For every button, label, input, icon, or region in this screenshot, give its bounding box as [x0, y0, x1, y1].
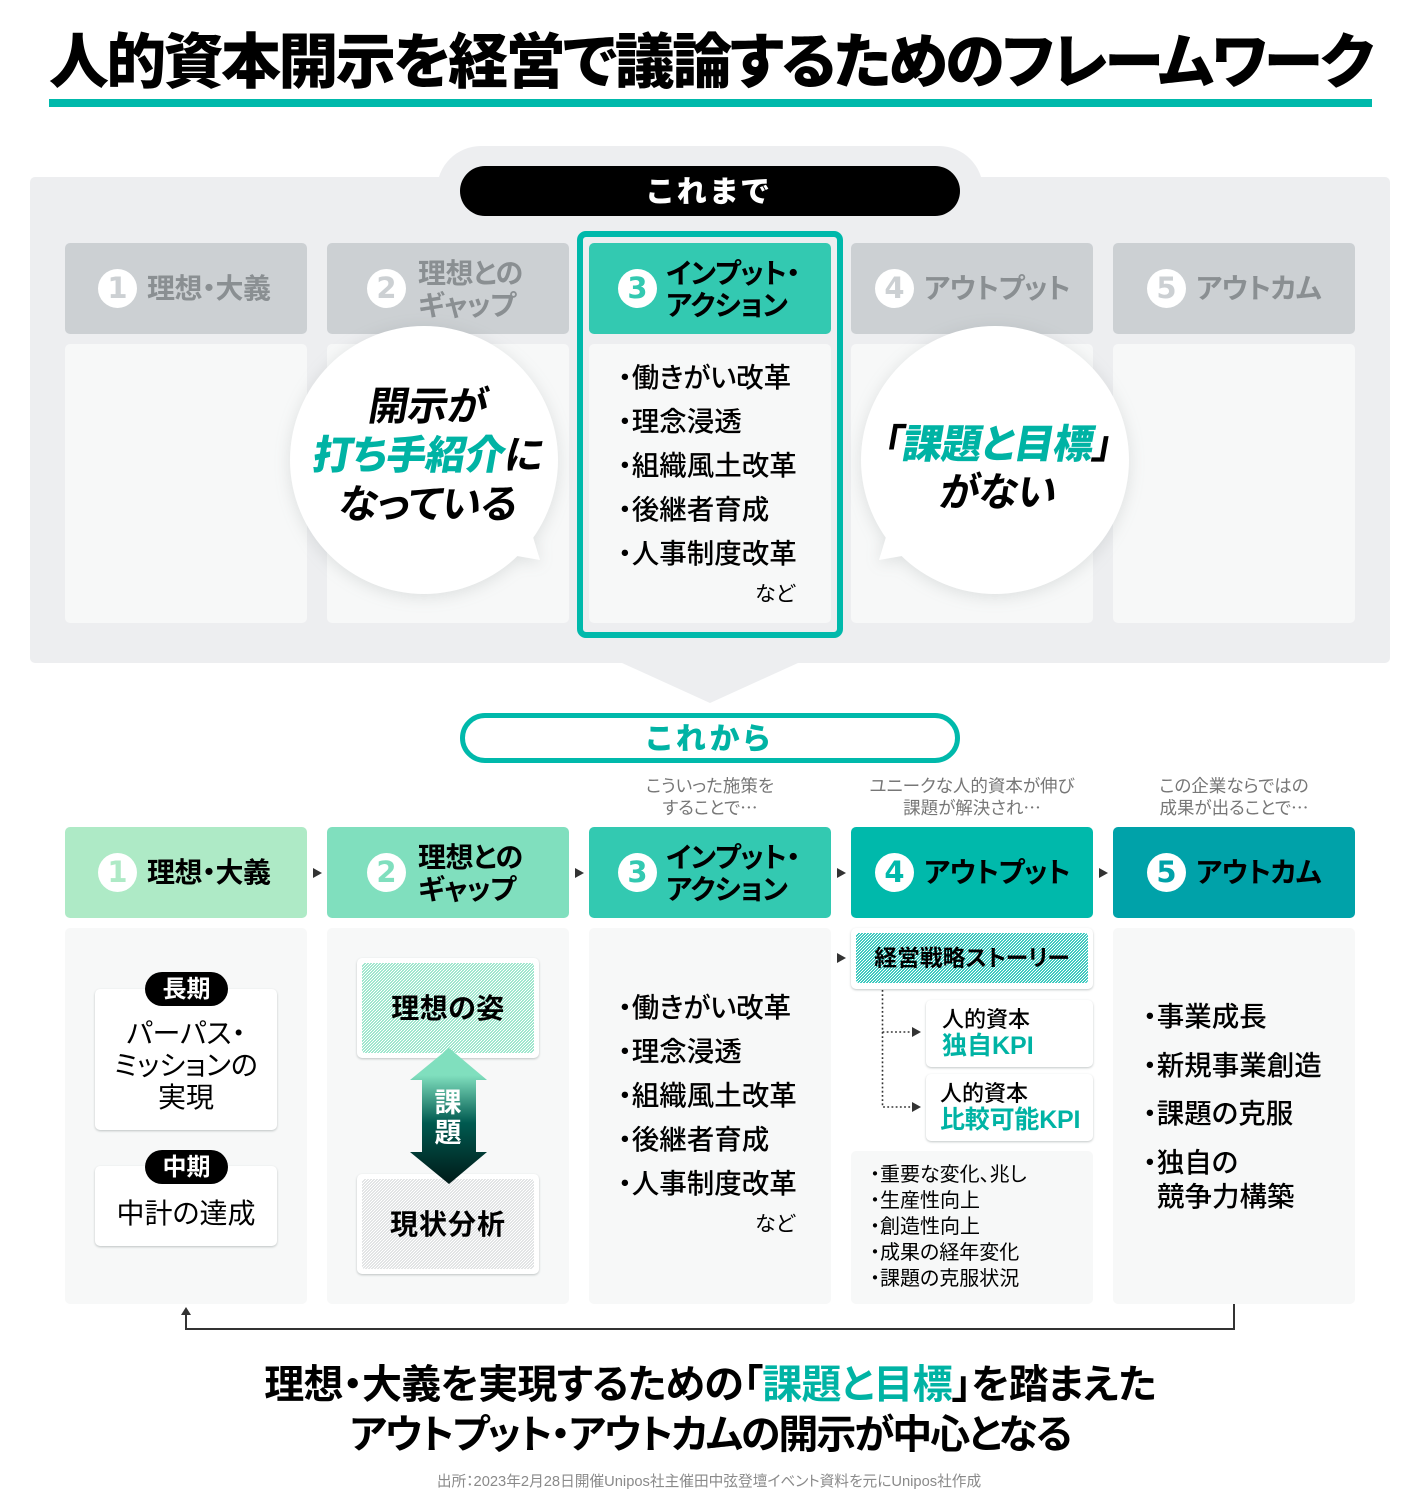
- arrow 1 to 2: [313, 868, 322, 878]
- list of actions: ・理念浸透: [618, 1036, 742, 1067]
- card text: 人的資本: [940, 1081, 1028, 1106]
- caption column 4: ユニークな人的資本が伸び: [870, 776, 1074, 796]
- column 4 header: アウトプット: [924, 273, 1070, 304]
- panel background: [30, 177, 1390, 663]
- hatched text block: 理想の姿: [391, 993, 505, 1024]
- body column 2: [327, 928, 569, 1304]
- caption column 5: [1159, 776, 1309, 820]
- badge: 長期: 長期: [162, 976, 210, 1003]
- column 1 body: [65, 344, 307, 623]
- column 5 header: [1113, 243, 1355, 334]
- conclusion text: [264, 1363, 1156, 1457]
- column 3 header: [589, 243, 831, 334]
- list of outcomes: ・事業成長: [1143, 1001, 1267, 1032]
- speech bubble left: [286, 326, 562, 601]
- bubble text: 開示が: [365, 385, 491, 429]
- bubble shape: [286, 326, 562, 601]
- column 5 body: [1113, 344, 1355, 623]
- column 2 header: [327, 243, 569, 334]
- list of actions: ・後継者育成: [618, 1124, 769, 1155]
- badge: 中期: 中期: [162, 1154, 210, 1181]
- bubble text: 打ち手紹介に: [309, 434, 547, 478]
- arrow to 経営戦略ストーリー: [837, 953, 846, 963]
- header 1: 理想・大義: 1: [107, 855, 128, 889]
- header 3: インプット・アクション: 3: [627, 855, 648, 889]
- arrow 4 to 5: [1099, 868, 1108, 878]
- title underline: [49, 99, 1372, 107]
- list of actions: [618, 992, 797, 1199]
- header 2: 理想とのギャップ: ギャップ: [418, 874, 516, 905]
- column 3 body list: ・働きがい改革: [618, 362, 791, 393]
- double arrow 課題: [410, 1048, 487, 1184]
- column 3 body list: ・人事制度改革: [618, 538, 797, 569]
- card: 理想の姿: [357, 958, 539, 1058]
- list text: ・成果の経年変化: [870, 1242, 1019, 1264]
- arrow 3 to 4: [837, 868, 846, 878]
- header 2: 理想とのギャップ: 理想との: [418, 842, 523, 873]
- title: 人的資本開示を経営で議論するためのフレームワーク: [49, 29, 1371, 96]
- list text: ・創造性向上: [870, 1216, 980, 1238]
- label 課題: 課: [434, 1088, 462, 1118]
- column 2 body: [327, 344, 569, 623]
- card: 中計の達成: [95, 1166, 277, 1246]
- column 1 header: 1: [107, 271, 128, 305]
- card text: 比較可能KPI: [940, 1106, 1080, 1134]
- column 1 header: [65, 243, 307, 334]
- column 4 header: 4: [884, 271, 905, 305]
- など: など: [755, 1213, 795, 1236]
- heading pill: これまで: これまで: [647, 176, 773, 209]
- panel pointer: [622, 663, 798, 703]
- column 1 header: 理想・大義: [147, 273, 271, 304]
- column 4 header: [851, 243, 1093, 334]
- conclusion text: アウトプット・アウトカムの開示が中心となる: [350, 1413, 1070, 1457]
- header 5: アウトカム: アウトカム: [1196, 857, 1321, 888]
- bubble text: なっている: [335, 483, 521, 527]
- column 2 header: ギャップ: [418, 290, 516, 321]
- list of actions: ・組織風土改革: [618, 1080, 797, 1111]
- caption column 3: [646, 776, 774, 820]
- card: 現状分析: [357, 1174, 539, 1274]
- header 2: 理想とのギャップ: 2: [376, 855, 397, 889]
- header 1: 理想・大義: [65, 827, 307, 918]
- header 4: アウトプット: アウトプット: [924, 857, 1070, 888]
- card text: 独自KPI: [942, 1032, 1034, 1060]
- header 3: インプット・アクション: [589, 827, 831, 918]
- column 3 body list: など: [755, 583, 795, 606]
- card: パーパス: パーパス・: [126, 1018, 246, 1049]
- header 5: アウトカム: 5: [1156, 855, 1177, 889]
- header 4: アウトプット: 4: [884, 855, 905, 889]
- conclusion text: 理想・大義を実現するための「課題と目標」を踏まえた: [264, 1363, 1156, 1407]
- bubble text: がない: [936, 470, 1060, 514]
- caption column 5: 成果が出ることで…: [1159, 795, 1308, 820]
- bubble text: 「課題と目標」: [880, 423, 1117, 467]
- speech bubble right: [857, 326, 1133, 601]
- list text: ・課題の克服状況: [870, 1268, 1019, 1290]
- list text: ・生産性向上: [870, 1190, 980, 1212]
- list second line: 競争力構築: [1157, 1181, 1294, 1212]
- arrow 2 to 3: [575, 868, 584, 878]
- body column 5: [1113, 928, 1355, 1304]
- column 5 header: 5: [1156, 271, 1177, 305]
- caption column 4: [870, 776, 1074, 820]
- panel: これまで: [30, 146, 1390, 703]
- column 3 body list: [589, 344, 831, 623]
- header 3: インプット・アクション: アクション: [666, 874, 787, 905]
- badge: 中期: [145, 1150, 228, 1184]
- bubble text: [309, 385, 547, 527]
- bubble shape: [857, 326, 1133, 601]
- list of outcomes: ・独自の: [1143, 1146, 1238, 1178]
- list of actions: ・人事制度改革: [618, 1168, 797, 1199]
- list: KPI examples: [851, 1151, 1093, 1304]
- card: パーパス: 実現: [158, 1082, 214, 1113]
- bubble text: [880, 423, 1117, 514]
- header 5: アウトカム: [1113, 827, 1355, 918]
- highlight frame around column 3: [577, 231, 843, 638]
- card: 独自KPI: [926, 1000, 1093, 1067]
- card: 比較可能KPI: [926, 1074, 1093, 1141]
- card text: [940, 1081, 1080, 1134]
- dotted connectors: [882, 990, 921, 1112]
- column 3 body list: ・組織風土改革: [618, 450, 797, 481]
- column 2 header: 理想との: [418, 258, 523, 289]
- column 3 header: アクション: [666, 290, 787, 321]
- hatched text block: [362, 963, 534, 1053]
- hatched text block: 経営戦略ストーリー: [874, 945, 1070, 971]
- heading pill: これから: これから: [646, 723, 774, 756]
- caption column 5: この企業ならではの: [1159, 776, 1309, 796]
- list text: ・重要な変化、兆し: [870, 1164, 1027, 1186]
- body column 1: [65, 928, 307, 1304]
- card: パーパス: ミッションの: [114, 1050, 258, 1081]
- hatched text block: [856, 933, 1088, 983]
- label 課題: 題: [434, 1118, 462, 1148]
- caption column 4: 課題が解決され…: [903, 795, 1041, 820]
- caption column 3: こういった施策を: [646, 776, 774, 796]
- card text: 人的資本: [942, 1007, 1030, 1032]
- header 2: 理想とのギャップ: [327, 827, 569, 918]
- panel tab bump: [437, 146, 983, 206]
- hatched text block: 現状分析: [390, 1209, 506, 1240]
- hatched text block: [362, 1179, 534, 1269]
- column 2 header: 2: [376, 271, 397, 305]
- column 5 header: アウトカム: [1196, 273, 1321, 304]
- badge: 長期: [145, 972, 228, 1006]
- header 4: アウトプット: [851, 827, 1093, 918]
- body column 3: [589, 928, 831, 1304]
- caption column 3: することで…: [662, 795, 758, 820]
- heading pill: これまで: [460, 166, 960, 216]
- list of outcomes: ・新規事業創造: [1143, 1050, 1322, 1080]
- source note: 出所：2023年2月28日開催Unipos社主催田中弦登壇イベント資料を元にUnipos社作成: [437, 1474, 981, 1490]
- card text: [942, 1007, 1034, 1060]
- column 3 header: インプット・: [666, 258, 800, 289]
- column 3 body list: ・後継者育成: [618, 494, 769, 525]
- column 3 header: 3: [627, 271, 648, 305]
- card: パーパス: [95, 989, 277, 1130]
- column 3 body list: ・理念浸透: [618, 406, 742, 437]
- label 課題: [434, 1088, 462, 1148]
- header 1: 理想・大義: 理想・大義: [147, 857, 271, 888]
- column 4 body: [851, 344, 1093, 623]
- list of outcomes: ・課題の克服: [1143, 1098, 1293, 1129]
- list of actions: ・働きがい改革: [618, 992, 791, 1023]
- list text: [870, 1164, 1027, 1290]
- list of outcomes: [1143, 1001, 1322, 1178]
- heading pill: これから: [460, 713, 960, 763]
- card: 経営戦略ストーリー: [851, 928, 1093, 989]
- header 3: インプット・アクション: インプット・: [666, 842, 800, 873]
- feedback arrow: [181, 1304, 1235, 1330]
- card: 中計の達成: 中計の達成: [116, 1198, 256, 1229]
